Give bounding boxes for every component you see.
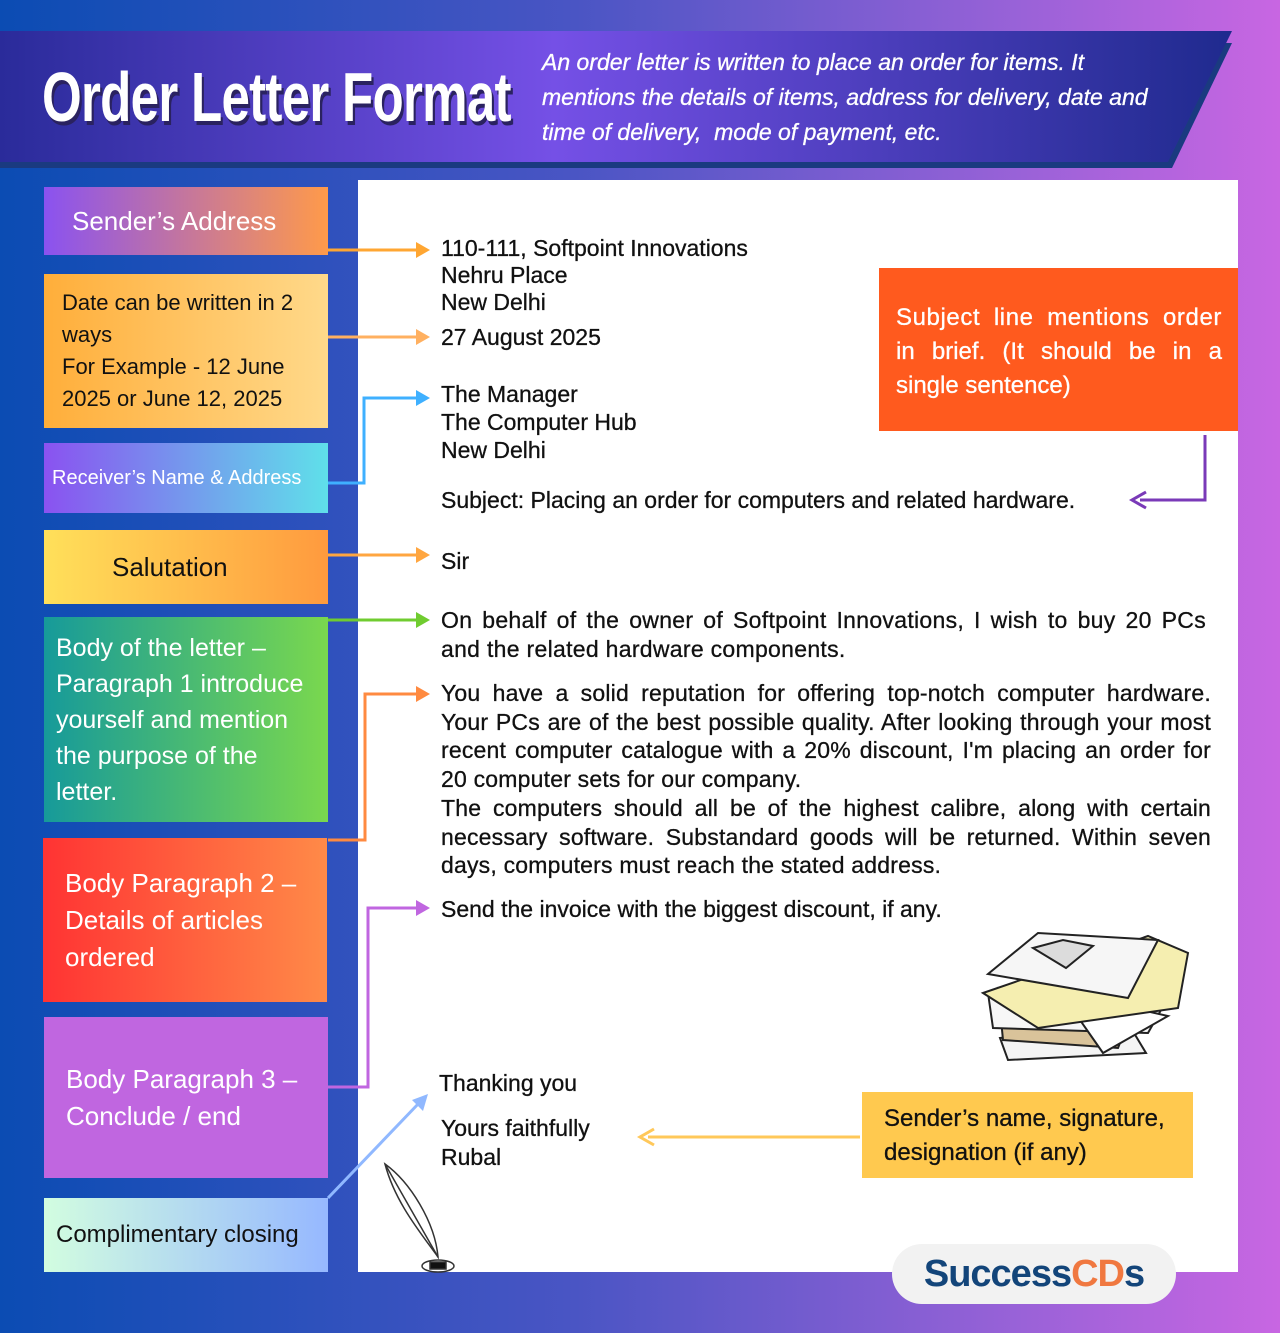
letter: subject: Subject: Placing an order for computers and related hardware. — [441, 487, 1075, 513]
sender name callout — [862, 1092, 1193, 1178]
label: receiver: Receiver’s Name & Address — [52, 467, 301, 489]
label: salutation — [44, 530, 328, 604]
letter: receiver: The Manager — [441, 381, 578, 407]
letter: receiver — [441, 381, 637, 463]
intro text — [540, 49, 1148, 146]
label: date: For Example - 12 June 2025 or June 12, 2025 — [62, 354, 285, 411]
letter: signature: Rubal — [441, 1144, 501, 1170]
label: date: Date can be written in 2 ways — [62, 290, 293, 347]
label: body 2 — [43, 838, 327, 1002]
letter: receiver: New Delhi — [441, 437, 546, 463]
letter: body 2: The computers should all be of the highest calibre, along with certain necessary software. Substandard goods will be returned. Within seven days, computers must reach the stated address. — [441, 795, 1211, 878]
intro text: An order letter is written to place an order for items. It — [542, 49, 1084, 75]
subject callout — [879, 268, 1238, 431]
letter: body 3: Send the invoice with the biggest discount, if any. — [441, 896, 942, 922]
letter: body 2: You have a solid reputation for offering top-notch computer hardware. Your PCs are of the best possible quality. After looking through your most recent computer catalogue with a 20% discount, I'm placing an order for 20 computer sets for our company. — [441, 680, 1211, 792]
label: sender's address: Sender’s Address — [72, 206, 276, 236]
label: sender's address — [44, 187, 328, 255]
logo: SuccessCDs — [892, 1244, 1176, 1304]
label: salutation: Salutation — [112, 552, 228, 582]
sender name callout: Sender’s name, signature, designation (if any) — [884, 1105, 1165, 1166]
letter: closing: Thanking you — [439, 1070, 577, 1096]
label: body 2: Body Paragraph 2 – Details of articles ordered — [65, 868, 296, 972]
title: Order Letter Format — [42, 58, 511, 136]
letter: sender address — [441, 235, 748, 315]
letter: receiver: The Computer Hub — [441, 409, 637, 435]
letter panel — [358, 180, 1238, 1272]
icon: envelopes — [980, 932, 1190, 1061]
label: date — [44, 274, 328, 428]
icon: quill pen — [384, 1162, 455, 1273]
letter: body 1: On behalf of the owner of Softpoint Innovations, I wish to buy 20 PCs and the related hardware components. — [441, 607, 1206, 662]
letter: date: 27 August 2025 — [441, 324, 601, 350]
label: receiver — [44, 443, 328, 513]
logo: SuccessCDs: SuccessCDs — [924, 1253, 1144, 1295]
letter: sender address: New Delhi — [441, 289, 546, 315]
letter: signature: Yours faithfully — [441, 1115, 590, 1141]
letter: sender address: 110-111, Softpoint Innovations — [441, 235, 748, 261]
letter: salutation: Sir — [441, 548, 469, 574]
label: complimentary closing: Complimentary closing — [56, 1221, 299, 1248]
letter: sender address: Nehru Place — [441, 262, 568, 288]
letter: body 2 — [441, 680, 1211, 878]
label: complimentary closing — [44, 1198, 328, 1272]
label: body 3 — [44, 1017, 328, 1178]
label: body 1: Body of the letter – Paragraph 1 introduce yourself and mention the purpose of the letter. — [56, 634, 303, 806]
label: body 3: Body Paragraph 3 – Conclude / end — [66, 1064, 297, 1130]
letter: signature — [441, 1115, 590, 1170]
intro text: mentions the details of items, address for delivery, date and — [542, 84, 1148, 110]
intro text: time of delivery, mode of payment, etc. — [542, 119, 942, 145]
header banner — [0, 31, 1232, 168]
subject callout: Subject line mentions order in brief. (It should be in a single sentence) — [896, 304, 1222, 399]
